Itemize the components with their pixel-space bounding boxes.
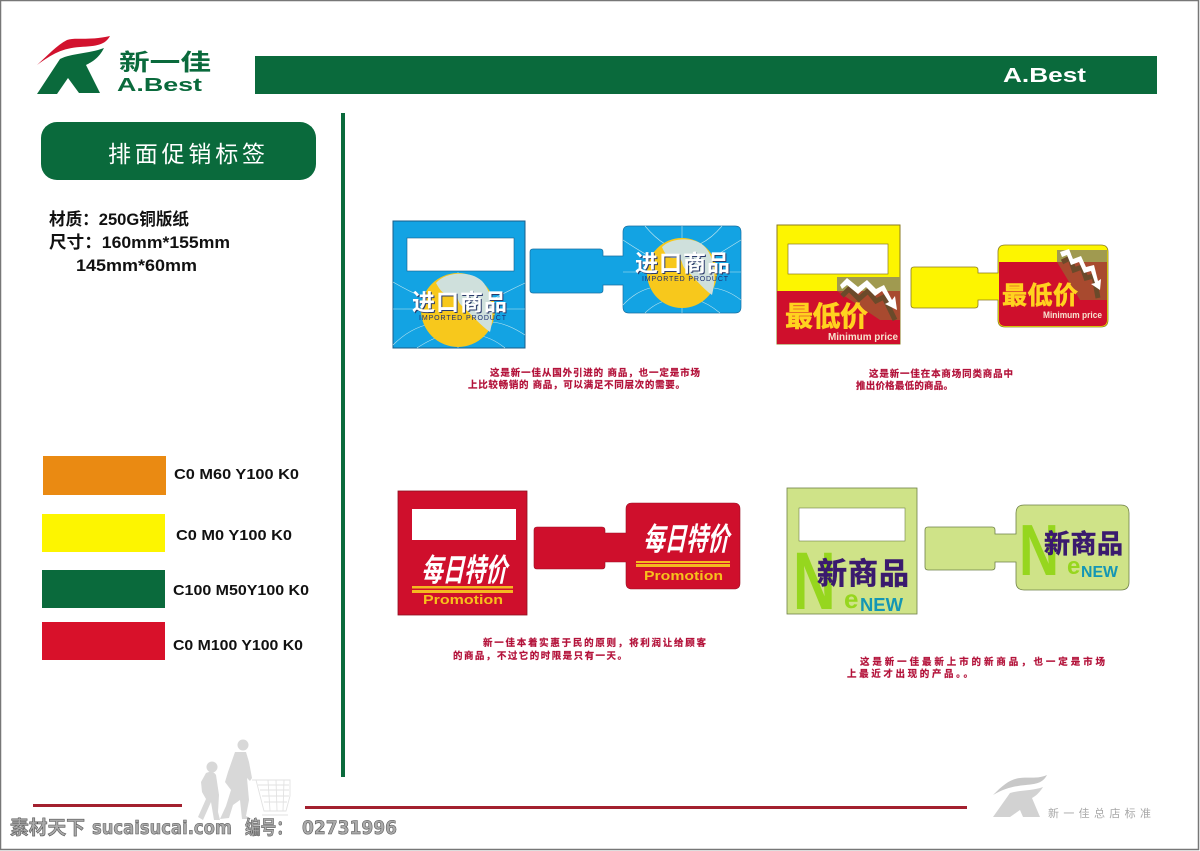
material specs: 145mm*60mm [76,256,197,275]
panel: new product [787,488,1129,680]
daily special: description: 的商品，不过它的时限是只有一天。 [453,650,627,662]
footer rule left [33,804,182,807]
daily special: front tag: 每日特价 [420,552,513,588]
colour swatches: C100 M50Y100 K0 [173,582,309,599]
panel: lowest price [777,225,1108,392]
new product: front tag: 新商品 [817,558,909,591]
logo: A.Best [37,36,211,95]
imported: fold tag: 进口商品 [636,251,731,277]
imported: front tag: 进口商品 [412,289,507,315]
panel: imported product [393,221,741,391]
footer rule right [305,806,967,809]
imported: description: 上比较畅销的 商品，可以满足不同层次的需要。 [468,379,685,391]
lowest price: fold tag: 最低价 [1002,282,1078,310]
watermark: 编号： [245,816,292,839]
daily special: front tag: Promotion [423,592,503,607]
logo: A.Best: A.Best [117,75,202,95]
new product: description: 这是新一佳最新上市的新商品，也一定是市场 [860,656,1105,668]
imported: fold tag: IMPORTED PRODUCT [642,276,729,283]
new product: description [847,656,1105,680]
daily special: fold tag: Promotion [644,568,723,583]
heading pill [41,122,316,180]
lowest price: description: 这是新一佳在本商场同类商品中 [869,368,1013,380]
new product: fold tag: NEW [1081,564,1119,581]
vertical divider [341,113,345,777]
watermark: 02731996 [302,817,397,839]
new product: fold tag: e [1067,553,1080,580]
imported: fold tag [530,226,741,313]
heading pill: 排面促销标签 [108,141,265,167]
imported: front tag: 进口商品 [413,290,508,316]
daily special: fold tag: 每日特价 [642,521,735,557]
footer logo grey [993,775,1047,817]
colour swatches: C0 M0 Y100 K0 [176,527,292,544]
header bar [255,56,1157,94]
material specs [49,209,230,275]
imported: description [468,367,700,391]
colour swatches: C0 M100 Y100 K0 [173,637,303,654]
new product: fold tag: N [1019,510,1059,591]
watermark: 素材天下 [10,817,85,839]
daily special: description [453,637,706,662]
daily special: front tag [398,491,527,615]
lowest price: description: 推出价格最低的商品。 [856,380,953,392]
new product: front tag: e [844,584,858,614]
panel: daily special [398,491,740,662]
daily special: fold tag [534,503,740,589]
lowest price: fold tag: Minimum price [1043,310,1102,320]
watermark [10,816,397,839]
lowest price: description [856,368,1013,392]
new product: description: 上最近才出现的产品。。 [847,668,973,680]
new product: fold tag: 新商品 [1044,529,1123,559]
lowest price: front tag [777,225,900,344]
icon: shoppers with cart silhouette [198,740,290,820]
imported: description: 这是新一佳从国外引进的 商品，也一定是市场 [490,367,700,379]
new product: front tag [787,488,917,627]
imported: front tag [393,221,525,348]
colour swatches: C0 M60 Y100 K0 [174,466,299,483]
imported: front tag: IMPORTED PRODUCT [419,315,507,322]
colour swatches [42,456,309,660]
daily special: description: 新一佳本着实惠于民的原则，将利润让给顾客 [483,637,706,649]
imported: fold tag: 进口商品 [635,250,730,276]
new product: front tag: NEW [860,595,903,615]
lowest price: front tag: 最低价 [785,301,868,332]
material specs: 尺寸：160mm*155mm [49,233,230,252]
lowest price: front tag: Minimum price [828,332,898,343]
logo: A.Best: 新一佳 [119,49,211,75]
watermark: sucaisucai.com [92,817,232,839]
material specs: 材质：250G铜版纸 [49,209,189,229]
new product: front tag: N [793,536,836,627]
header bar: A.Best [1003,65,1086,87]
lowest price: fold tag [911,245,1108,327]
new product: fold tag [925,505,1129,591]
footer caption: 新一佳总店标准 [1048,806,1151,820]
